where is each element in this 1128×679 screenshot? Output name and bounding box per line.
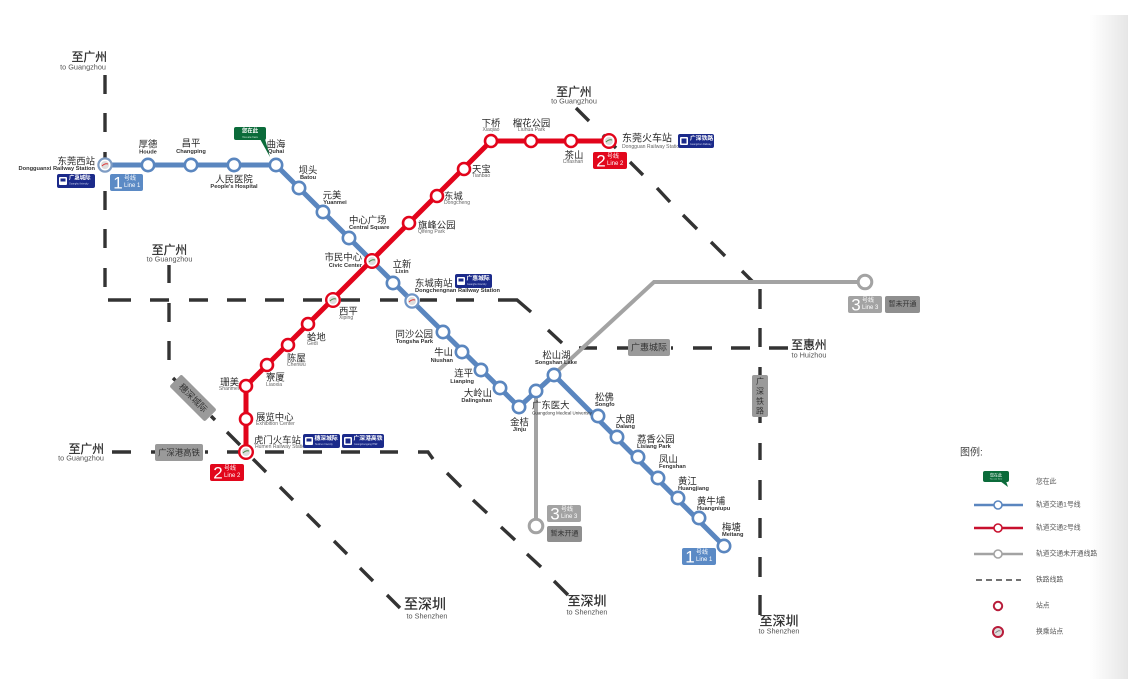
line badges: 号线 <box>561 505 573 513</box>
line 2 station labels: Liaoxia <box>266 382 282 388</box>
line 1 station labels: Jinju <box>513 427 527 433</box>
you are here marker: 您在此 <box>242 126 259 134</box>
line 1 station labels: 厚德 <box>139 138 158 150</box>
line 1 station labels: 昌平 <box>182 138 200 148</box>
line 2 station labels: Xiping <box>339 315 353 321</box>
line 2 station labels: Shanmei <box>219 386 239 392</box>
city direction labels: to Shenzhen <box>759 626 799 636</box>
line 1 station labels: Niushan <box>431 358 454 364</box>
line 1 station labels: Lianping <box>450 379 475 385</box>
line 2 station labels: 西平 <box>339 306 358 316</box>
line 1 station labels: 中心广场 <box>349 214 387 226</box>
line 2 station labels: Liuhua Park <box>518 127 546 133</box>
city direction labels: 至广州 <box>152 243 187 257</box>
line 1 station labels: 黄江 <box>678 476 697 486</box>
line badges: 号线 <box>696 548 708 556</box>
line badges: 2 <box>213 464 223 482</box>
city direction labels <box>58 50 827 636</box>
legend: line 1: 轨道交通1号线 <box>1036 500 1081 508</box>
line 1 station labels: 梅塘 <box>722 522 741 532</box>
legend: unopened line <box>974 548 1097 558</box>
intercity railway gray labels: 穗深城际 <box>177 381 210 414</box>
line 1 station labels: 大岭山 <box>464 388 492 398</box>
line badges: 号线 <box>124 174 136 182</box>
legend: station: 站点 <box>1036 600 1050 610</box>
line 1 station labels: 松佛 <box>595 392 614 402</box>
line 2 station labels: Dongguan Railway Station <box>622 144 682 150</box>
line badges <box>110 152 920 566</box>
line 1 station labels: Huangniupu <box>697 506 731 512</box>
line badges: 1 <box>685 548 695 566</box>
you are here marker <box>234 126 270 157</box>
line 1 station labels: 东莞西站 <box>57 156 95 166</box>
city direction labels: 至深圳 <box>567 594 607 608</box>
line 1 station labels: Lixin <box>395 269 409 275</box>
line 2 station labels: 天宝 <box>472 164 491 174</box>
line 1 station labels: 坝头 <box>299 164 317 176</box>
line 2 station labels: Chenwu <box>287 362 306 368</box>
line 2 station labels: Xiaqiao <box>482 127 500 133</box>
line 2 station labels: 陈屋 <box>287 352 306 364</box>
line 2 station labels: Chashan <box>563 159 583 165</box>
line badges: Line 2 <box>224 473 241 479</box>
line badges: 暂未开通 <box>550 528 578 538</box>
line 2 station labels: 蛤地 <box>307 332 326 342</box>
line 1 station labels: 大朗 <box>616 414 635 424</box>
line 2 station labels: 珊美 <box>220 376 239 388</box>
railway transfer tags: Guangshen Railway <box>690 143 712 146</box>
railway transfer tags: Guanghui Intercity <box>69 182 89 186</box>
line 1 station labels: Tongsha Park <box>396 339 434 345</box>
line 2 station labels: 寮厦 <box>266 372 285 382</box>
line 1 station labels: Dongguanxi Railway Station <box>19 166 96 172</box>
line 1 station labels <box>19 138 744 538</box>
city direction labels: 至惠州 <box>791 338 827 352</box>
line 1 station labels: Songfo <box>595 402 615 408</box>
railway transfer tags: 穗深城际 <box>314 434 338 442</box>
line 2 station labels: Qifeng Park <box>418 229 445 235</box>
line 2 station labels: 虎门火车站 <box>254 434 301 446</box>
legend: you are here: You are here <box>990 478 1003 480</box>
interchange stations <box>98 134 616 459</box>
legend: railway <box>976 574 1063 584</box>
railway transfer tags: 广惠城际 <box>466 274 490 282</box>
line badges: Line 3 <box>862 305 879 311</box>
line 1 station labels: 荔香公园 <box>637 434 675 444</box>
line 2 station labels: 旗峰公园 <box>418 220 456 230</box>
city direction labels: 至广州 <box>556 85 592 99</box>
line badges: Line 1 <box>696 557 713 563</box>
line 2 station labels: Gedi <box>307 341 318 347</box>
intercity railway gray labels: 广 <box>756 376 764 386</box>
line badges: 暂未开通 <box>888 299 916 308</box>
legend: unopened line: 轨道交通未开通线路 <box>1036 548 1097 558</box>
line 2 <box>240 135 609 452</box>
intercity railway gray labels: 广惠城际 <box>631 342 667 352</box>
line badges: 3 <box>851 296 861 314</box>
city direction labels: to Guangzhou <box>147 254 192 264</box>
line 2 station labels: Humen Railway Station <box>255 444 308 450</box>
line 2 station labels: Dongcheng <box>444 200 470 206</box>
line 2 station labels: 东城 <box>444 190 463 202</box>
line 1 station labels: Batou <box>300 175 317 181</box>
city direction labels: to Shenzhen <box>567 608 607 616</box>
legend: you are here: 您在此 <box>1036 476 1057 486</box>
legend: railway: 铁路线路 <box>1036 574 1063 584</box>
legend: interchange: 换乘站点 <box>1036 626 1063 636</box>
intercity railway gray labels: 广深港高铁 <box>158 448 201 458</box>
line 2 station labels: 下桥 <box>482 118 501 128</box>
line 1 station labels: Changping <box>176 149 206 155</box>
line 1 station labels: 元美 <box>323 190 341 200</box>
you are here marker: You are here <box>242 135 258 139</box>
city direction labels: to Guangzhou <box>60 62 106 72</box>
line 2 station labels: Exhibition Center <box>256 421 295 427</box>
line 2 station labels: Tianbao <box>472 173 490 179</box>
city direction labels: 至广州 <box>72 50 107 64</box>
legend: line 2: 轨道交通2号线 <box>1036 522 1081 532</box>
legend: line 1 <box>974 500 1081 509</box>
railway transfer tags: 广深港高铁 <box>354 434 383 442</box>
line 3 unopened <box>529 275 872 533</box>
line 1 station labels: 同沙公园 <box>395 328 433 340</box>
city direction labels: 至广州 <box>69 442 104 456</box>
intercity railway gray labels: 深 <box>756 387 764 396</box>
line 1 station labels: 东城南站 <box>415 278 453 288</box>
line badges: Line 2 <box>607 161 624 167</box>
line badges: 3 <box>550 504 560 524</box>
line 2 station labels <box>219 118 682 450</box>
line badges: 2 <box>596 152 606 170</box>
line 1 station labels: Central Square <box>349 225 389 231</box>
legend: you are here <box>983 471 1057 487</box>
legend: you are here: 您在此 <box>990 472 1002 478</box>
line 1 station labels: Houde <box>139 150 157 156</box>
line 2 station labels: 东莞火车站 <box>622 132 672 144</box>
line 1 station labels: Quhai <box>268 149 284 155</box>
railway transfer tags <box>57 134 714 448</box>
city direction labels: 至深圳 <box>404 596 446 612</box>
line 2 station labels: 榴花公园 <box>513 118 550 128</box>
line badges: 号线 <box>862 296 874 304</box>
city direction labels: to Guangzhou <box>58 454 104 462</box>
city direction labels: to Huizhou <box>792 350 826 360</box>
city direction labels: to Shenzhen <box>407 612 447 620</box>
line 1 station labels: 松山湖 <box>542 350 571 360</box>
legend: station <box>994 600 1050 610</box>
line 2 station labels: 茶山 <box>565 150 583 160</box>
line 1 station labels: Civic Center <box>329 263 363 269</box>
line 1 station labels: 广东医大 <box>532 400 570 410</box>
railway transfer tags: Guanghui Intercity <box>467 283 487 286</box>
line badges: 号线 <box>224 464 236 472</box>
line 1 station labels: Yuanmei <box>323 200 347 206</box>
line 1 station labels: Dalang <box>616 424 635 430</box>
line 1 station labels: 市民中心 <box>324 252 363 262</box>
line 1 station labels: 曲海 <box>267 138 286 150</box>
line badges: Line 1 <box>124 183 141 189</box>
line badges: 号线 <box>607 152 619 160</box>
line 1 station labels: Songshan Lake <box>535 360 577 366</box>
line 2 station labels: 展览中心 <box>256 412 294 422</box>
line badges: Line 3 <box>561 514 578 520</box>
line 1 station labels: 立新 <box>393 258 411 270</box>
line 1 station labels: 凤山 <box>659 454 678 464</box>
intercity railway gray labels <box>155 339 768 461</box>
line 1 station labels: Fengshan <box>659 464 686 470</box>
line 1 station labels: 人民医院 <box>215 174 253 184</box>
railway transfer tags: 广深铁路 <box>690 134 713 142</box>
line 1 station labels: 黄牛埔 <box>697 496 725 506</box>
legend: line 2 <box>974 522 1081 532</box>
line 1 station labels: Huangjiang <box>678 486 709 492</box>
line 1 station labels: 连平 <box>454 368 473 378</box>
line 1 station labels: Dongchengnan Railway Station <box>415 288 501 294</box>
intercity railway gray labels: 路 <box>756 406 764 416</box>
legend: interchange <box>993 626 1063 637</box>
railway transfer tags: 广惠城际 <box>69 174 91 182</box>
line 1 station labels: 金桔 <box>510 416 529 428</box>
line 1 station labels: Lisiang Park <box>637 444 672 450</box>
line 1 station labels: Guangdong Medical Univeristy <box>532 410 593 416</box>
railway transfer tags: Guangshengang HSR <box>354 443 378 446</box>
railway transfer tags: Suishen Intercity <box>315 443 333 446</box>
line badges: 1 <box>113 174 123 192</box>
intercity railway gray labels: 铁 <box>756 396 764 406</box>
line 1 station labels: 牛山 <box>434 346 453 358</box>
line 1 station labels: Meitang <box>722 532 744 538</box>
line 1 <box>105 159 730 552</box>
city direction labels: to Guangzhou <box>551 96 597 106</box>
line 1 station labels: People's Hospital <box>210 184 258 190</box>
line 1 station labels: Dalingshan <box>461 398 493 404</box>
legend title: 图例: <box>960 446 983 458</box>
legend <box>960 446 1097 637</box>
city direction labels: 至深圳 <box>759 614 799 628</box>
railway dashed lines <box>105 75 788 615</box>
